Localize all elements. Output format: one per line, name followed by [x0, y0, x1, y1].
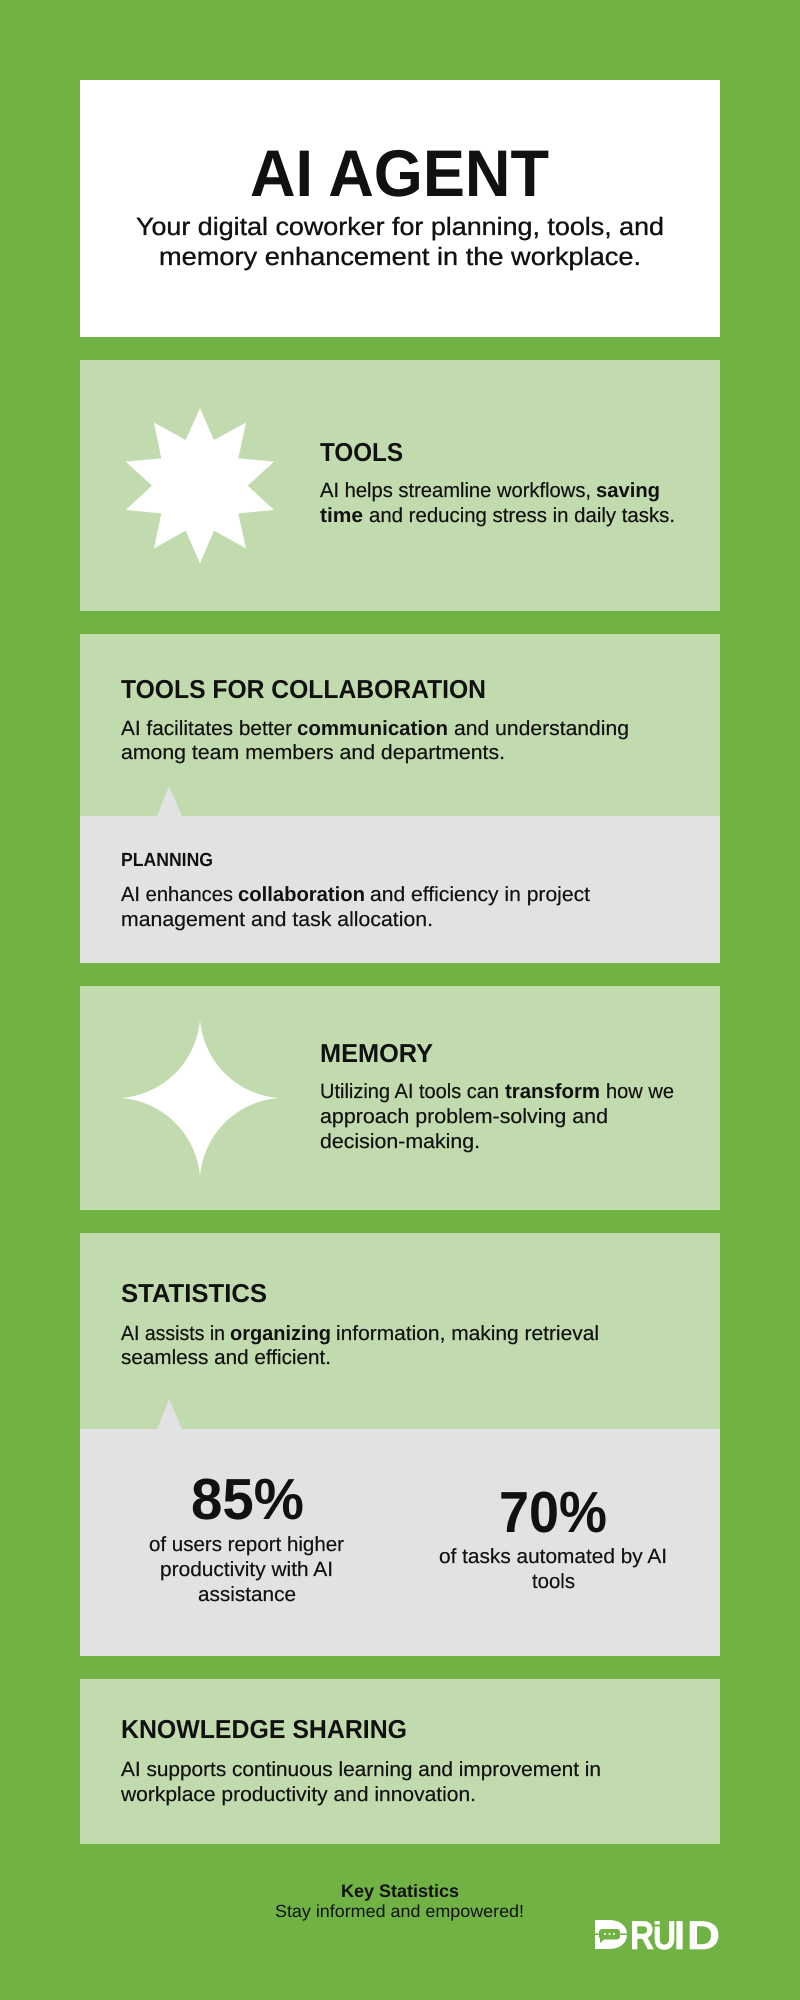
text: planning body: AI enhances — [121, 883, 233, 906]
text: memory body — [320, 1080, 674, 1153]
panel: title — [80, 80, 720, 337]
logo wordmark: D — [687, 1914, 720, 1958]
text: memory body: transform — [505, 1080, 600, 1103]
text: statistics body: information, making retrieval — [336, 1322, 599, 1345]
text: knowledge sharing body: workplace productivity and innovation. — [120, 1783, 476, 1806]
text: planning body — [121, 883, 590, 931]
icon: four-point sparkle — [122, 1020, 278, 1176]
text: collaboration body: AI facilitates better — [121, 717, 292, 740]
panel: memory — [80, 986, 720, 1210]
text: statistics body: AI assists in — [121, 1322, 225, 1345]
icon: ten-point star — [126, 408, 274, 563]
panel: tools — [80, 360, 720, 611]
footer text: Key Statistics — [341, 1881, 459, 1901]
stat: 85% — [149, 1467, 344, 1606]
text: tools body: time — [320, 504, 363, 527]
pointer triangle — [157, 1399, 182, 1429]
text: planning body: and efficiency in project — [370, 883, 590, 906]
text: planning body: collaboration — [238, 883, 365, 906]
stat: 85%: assistance — [198, 1583, 296, 1606]
subtitle: memory enhancement in the workplace. — [159, 243, 641, 271]
text: tools body — [320, 479, 675, 527]
text: statistics body — [121, 1322, 599, 1369]
heading: tools for collaboration: TOOLS FOR COLLABORATION — [121, 674, 486, 704]
panel: statistics numbers — [80, 1399, 720, 1656]
heading: tools: TOOLS — [320, 437, 403, 467]
pointer triangle — [157, 786, 182, 816]
logo wordmark: R — [630, 1914, 654, 1958]
panel: statistics intro — [80, 1233, 720, 1429]
logo mark: D with chat bubble — [595, 1920, 627, 1949]
text: collaboration body: among team members and departments. — [121, 741, 505, 764]
stat: 85%: of users report higher — [149, 1533, 344, 1556]
title: AI AGENT — [250, 136, 549, 210]
footer text — [275, 1881, 524, 1921]
text: collaboration body — [121, 717, 629, 764]
text: tools body: and reducing stress in daily tasks. — [369, 504, 675, 527]
text: memory body: approach problem-solving and — [320, 1105, 608, 1128]
heading: statistics: STATISTICS — [121, 1278, 267, 1308]
text: tools body: AI helps streamline workflows, — [320, 479, 591, 502]
stat: 70%: 70% — [499, 1480, 607, 1545]
text: memory body: decision-making. — [320, 1130, 480, 1153]
panel: tools for collaboration — [80, 634, 720, 816]
text: collaboration body: communication — [297, 717, 448, 740]
stat: 70% — [439, 1480, 667, 1593]
panel: knowledge sharing — [80, 1679, 720, 1844]
text: planning body: management and task allocation. — [121, 908, 433, 931]
text: knowledge sharing body — [120, 1758, 601, 1806]
heading: planning: PLANNING — [121, 850, 213, 871]
text: memory body: how we — [606, 1080, 674, 1103]
subtitle — [136, 213, 664, 271]
logo wordmark: I — [674, 1914, 685, 1958]
heading: memory: MEMORY — [320, 1038, 433, 1068]
footer text: Stay informed and empowered! — [275, 1901, 524, 1921]
subtitle: Your digital coworker for planning, tools, and — [136, 213, 664, 241]
text: collaboration body: and understanding — [454, 717, 629, 740]
text: statistics body: seamless and efficient. — [121, 1346, 331, 1369]
text: memory body: Utilizing AI tools can — [320, 1080, 499, 1103]
stat: 85%: 85% — [191, 1467, 304, 1532]
text: knowledge sharing body: AI supports continuous learning and improvement in — [121, 1758, 601, 1781]
stat: 70%: tools — [532, 1570, 575, 1593]
logo wordmark: U — [653, 1914, 676, 1958]
stat: 85%: productivity with AI — [160, 1558, 333, 1581]
text: statistics body: organizing — [230, 1322, 331, 1345]
logo wordmark — [630, 1914, 720, 1958]
logo: Druid — [595, 1914, 720, 1958]
heading: knowledge sharing: KNOWLEDGE SHARING — [121, 1714, 407, 1744]
stat: 70%: of tasks automated by AI — [439, 1545, 667, 1568]
panel: planning — [80, 786, 720, 963]
text: tools body: saving — [596, 479, 660, 502]
